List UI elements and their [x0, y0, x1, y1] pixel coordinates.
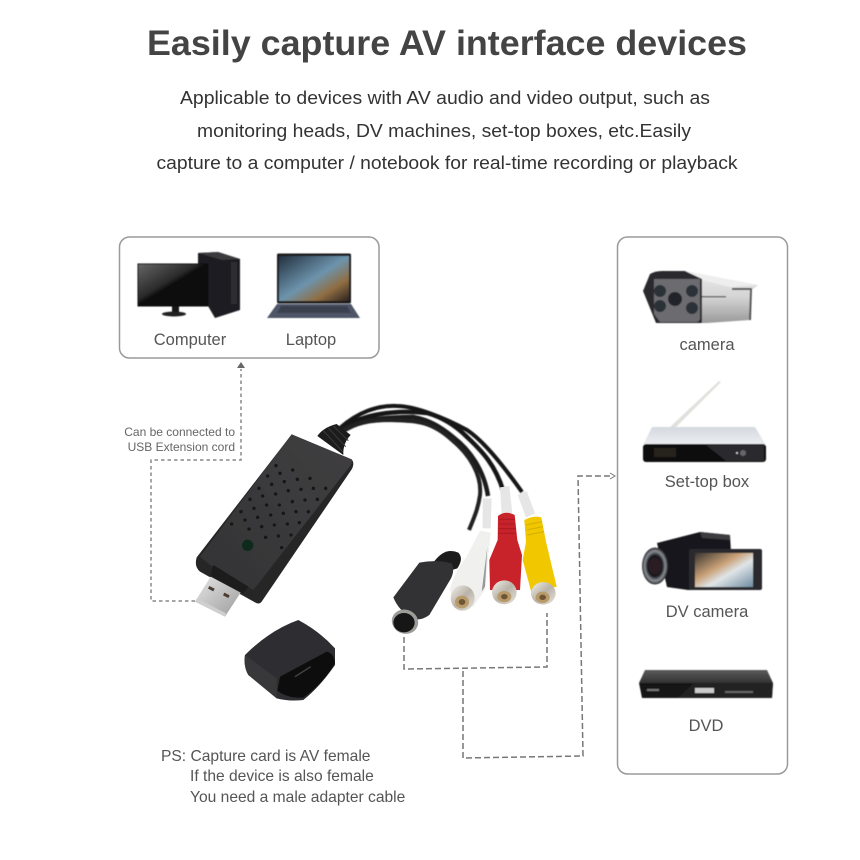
red RCA plug: [489, 513, 522, 604]
note: USB extension cord: [124, 425, 235, 454]
yellow RCA plug: [523, 517, 557, 605]
arrow: USB plug to computer panel: [151, 362, 245, 601]
label: computer: Computer: [154, 331, 227, 349]
icon: desktop computer: [138, 252, 240, 318]
panel: AV source devices: [618, 237, 788, 774]
description text: monitoring heads, DV machines, set-top boxes, etc.Easily: [197, 120, 692, 141]
USB cap: [245, 620, 335, 701]
icon: security camera: [643, 271, 758, 323]
note: USB extension cord: Can be connected to: [124, 425, 235, 439]
label: set-top box: Set-top box: [665, 473, 750, 491]
connectors: [388, 486, 557, 638]
description text: Applicable to devices with AV audio and video output, such as: [180, 87, 710, 108]
note: USB extension cord: USB Extension cord: [128, 440, 235, 454]
arrow: connectors to AV devices panel: [404, 473, 615, 758]
PS note: If the device is also female: [190, 768, 374, 785]
USB plug: [195, 577, 241, 617]
strain relief: [317, 424, 351, 455]
label: DV camera: DV camera: [666, 603, 749, 621]
label: camera: camera: [679, 336, 735, 354]
icon: DVD player: [639, 670, 773, 698]
icon: set-top box: [643, 381, 766, 462]
label: laptop: Laptop: [286, 331, 336, 349]
LED indicator: [242, 540, 253, 551]
PS note: [161, 748, 405, 806]
panel: computer and laptop: [120, 237, 379, 358]
white RCA plug: [450, 531, 491, 611]
title: Easily capture AV interface devices: [147, 24, 747, 63]
icon: DV camera: [642, 532, 762, 590]
PS note: You need a male adapter cable: [190, 789, 405, 806]
cables: [336, 406, 522, 530]
label: DVD: DVD: [689, 717, 723, 735]
vent holes: [230, 464, 327, 549]
description text: [156, 87, 738, 173]
capture device with USB plug: [195, 424, 353, 617]
device body: [196, 434, 353, 604]
S-video plug: [388, 551, 461, 638]
description text: capture to a computer / notebook for real-time recording or playback: [156, 152, 738, 173]
cable sleeves: [483, 486, 535, 528]
icon: laptop: [267, 254, 360, 318]
PS note: PS: Capture card is AV female: [161, 748, 370, 765]
